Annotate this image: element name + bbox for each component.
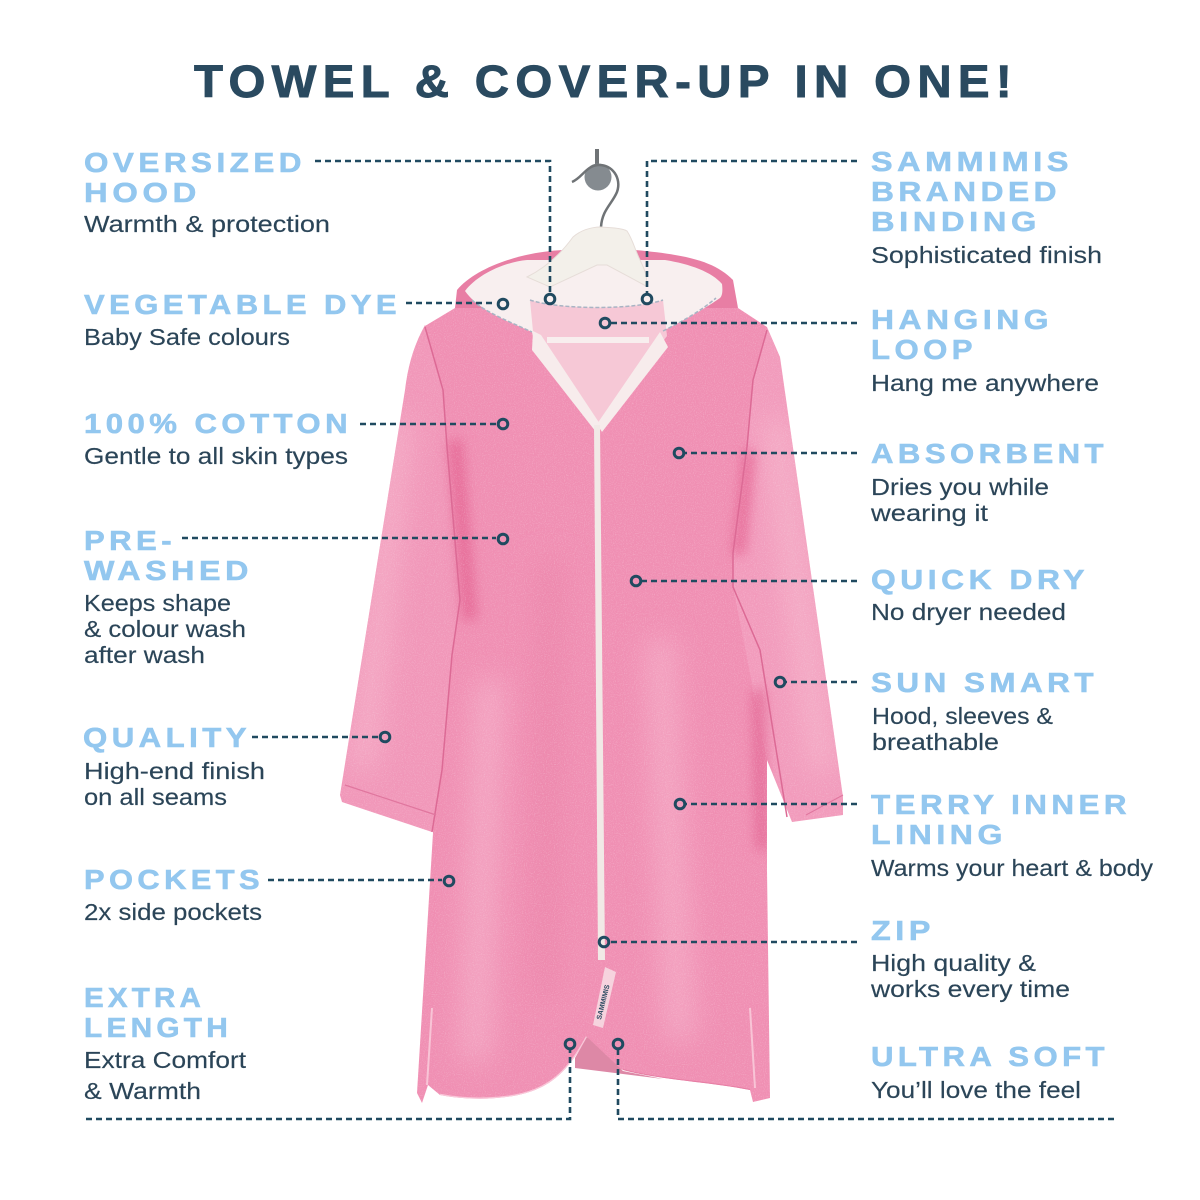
label: zip: ZIP	[871, 915, 935, 946]
label: hanging loop: LOOP	[871, 334, 977, 365]
brand tag	[593, 967, 616, 1028]
label: extra length: Extra Comfort	[84, 1047, 247, 1073]
label: ultra soft: ULTRA SOFT	[871, 1041, 1109, 1072]
label: oversized hood: OVERSIZED	[84, 147, 306, 178]
connector: absorbent	[674, 448, 857, 458]
zipper lapels	[532, 331, 668, 432]
robe fabric shading	[330, 240, 850, 1110]
panel: left feature labels	[83, 147, 401, 1104]
label: absorbent: Dries you while	[871, 474, 1049, 500]
label: pre-washed: after wash	[84, 642, 205, 668]
label: pockets: POCKETS	[84, 864, 264, 895]
label: sun smart: breathable	[872, 729, 999, 755]
label: pre-washed	[84, 525, 253, 668]
label: quick dry: QUICK DRY	[871, 564, 1089, 595]
hood binding	[472, 298, 716, 332]
illustration: pink hooded robe on hanger	[330, 149, 850, 1110]
label: pre-washed: & colour wash	[84, 616, 246, 642]
robe body	[417, 308, 770, 1103]
inner hem back panel	[575, 1037, 663, 1079]
connector: sun smart	[775, 677, 857, 687]
sleeve seams	[345, 327, 843, 832]
label: oversized hood: Warmth & protection	[84, 211, 330, 237]
side slits	[427, 1008, 755, 1088]
panel: right feature labels	[870, 146, 1154, 1103]
robe hood outer	[455, 250, 738, 345]
connector: sammimis branded binding	[642, 161, 857, 304]
connector: quick dry	[631, 576, 857, 586]
label: vegetable dye	[84, 289, 401, 350]
label: extra length: LENGTH	[84, 1012, 232, 1043]
label: absorbent	[870, 438, 1108, 526]
connector: pre-washed	[182, 534, 508, 544]
label: sammimis branded binding: BRANDED	[871, 176, 1061, 207]
label: zip: works every time	[870, 976, 1070, 1002]
label: extra length: & Warmth	[84, 1078, 201, 1104]
label: sammimis branded binding: BINDING	[871, 206, 1041, 237]
label: quick dry	[871, 564, 1089, 625]
label: zip: High quality &	[871, 950, 1036, 976]
icon: wall hook	[572, 149, 618, 227]
label: 100% cotton: Gentle to all skin types	[84, 443, 348, 469]
label: extra length: EXTRA	[84, 982, 205, 1013]
connector: ultra soft	[613, 1039, 1114, 1119]
hanger bar	[547, 337, 649, 343]
label: 100% cotton	[84, 408, 352, 469]
label: sun smart: Hood, sleeves &	[872, 703, 1053, 729]
label: quality	[83, 722, 265, 810]
label: pockets	[84, 864, 264, 925]
label: zip	[870, 915, 1070, 1002]
label: oversized hood: HOOD	[84, 177, 201, 208]
label: ultra soft	[871, 1041, 1109, 1103]
connector: terry inner lining	[675, 799, 857, 809]
label: sun smart: SUN SMART	[871, 667, 1098, 698]
label: hanging loop	[871, 304, 1099, 396]
connector: pockets	[268, 876, 454, 886]
label: absorbent: ABSORBENT	[871, 438, 1108, 469]
label: 100% cotton: 100% COTTON	[84, 408, 352, 439]
connector: 100% cotton	[360, 419, 508, 429]
title: TOWEL & COVER-UP IN ONE!	[194, 56, 1018, 107]
label: vegetable dye: Baby Safe colours	[84, 324, 290, 350]
robe right sleeve	[733, 327, 843, 822]
label: sun smart	[871, 667, 1098, 755]
zip	[594, 425, 605, 960]
label: pre-washed: PRE-	[84, 525, 176, 556]
label: absorbent: wearing it	[870, 500, 989, 526]
connector: extra length	[86, 1039, 575, 1119]
hood white lining	[465, 260, 722, 345]
hanger	[527, 227, 647, 287]
label: terry inner lining	[871, 789, 1154, 881]
label: pockets: 2x side pockets	[84, 899, 262, 925]
label: quick dry: No dryer needed	[871, 599, 1066, 625]
callout connectors	[86, 161, 1114, 1119]
label: quality: QUALITY	[83, 722, 251, 753]
connector: zip	[599, 937, 857, 947]
label: pre-washed: Keeps shape	[84, 590, 231, 616]
label: terry inner lining: LINING	[871, 819, 1007, 850]
label: oversized hood	[84, 147, 330, 237]
connector: oversized hood	[315, 161, 555, 304]
label: extra length	[84, 982, 247, 1104]
label: sammimis branded binding	[871, 146, 1102, 268]
terry inner lining	[530, 300, 667, 425]
label: vegetable dye: VEGETABLE DYE	[84, 289, 401, 320]
connector: hanging loop	[600, 318, 857, 328]
connector: vegetable dye	[406, 299, 508, 309]
label: sammimis branded binding: Sophisticated finish	[871, 242, 1102, 268]
label: quality: High-end finish	[84, 758, 265, 784]
label: hanging loop: HANGING	[871, 304, 1053, 335]
connector: quality	[252, 732, 390, 742]
label: terry inner lining: Warms your heart & body	[871, 855, 1154, 881]
robe left sleeve	[340, 325, 460, 832]
label: terry inner lining: TERRY INNER	[871, 789, 1131, 820]
label: ultra soft: You’ll love the feel	[871, 1077, 1081, 1103]
brand tag: SAMMIMIS	[596, 984, 612, 1020]
label: sammimis branded binding: SAMMIMIS	[871, 146, 1073, 177]
label: quality: on all seams	[84, 784, 227, 810]
label: hanging loop: Hang me anywhere	[871, 370, 1099, 396]
label: pre-washed: WASHED	[84, 555, 253, 586]
